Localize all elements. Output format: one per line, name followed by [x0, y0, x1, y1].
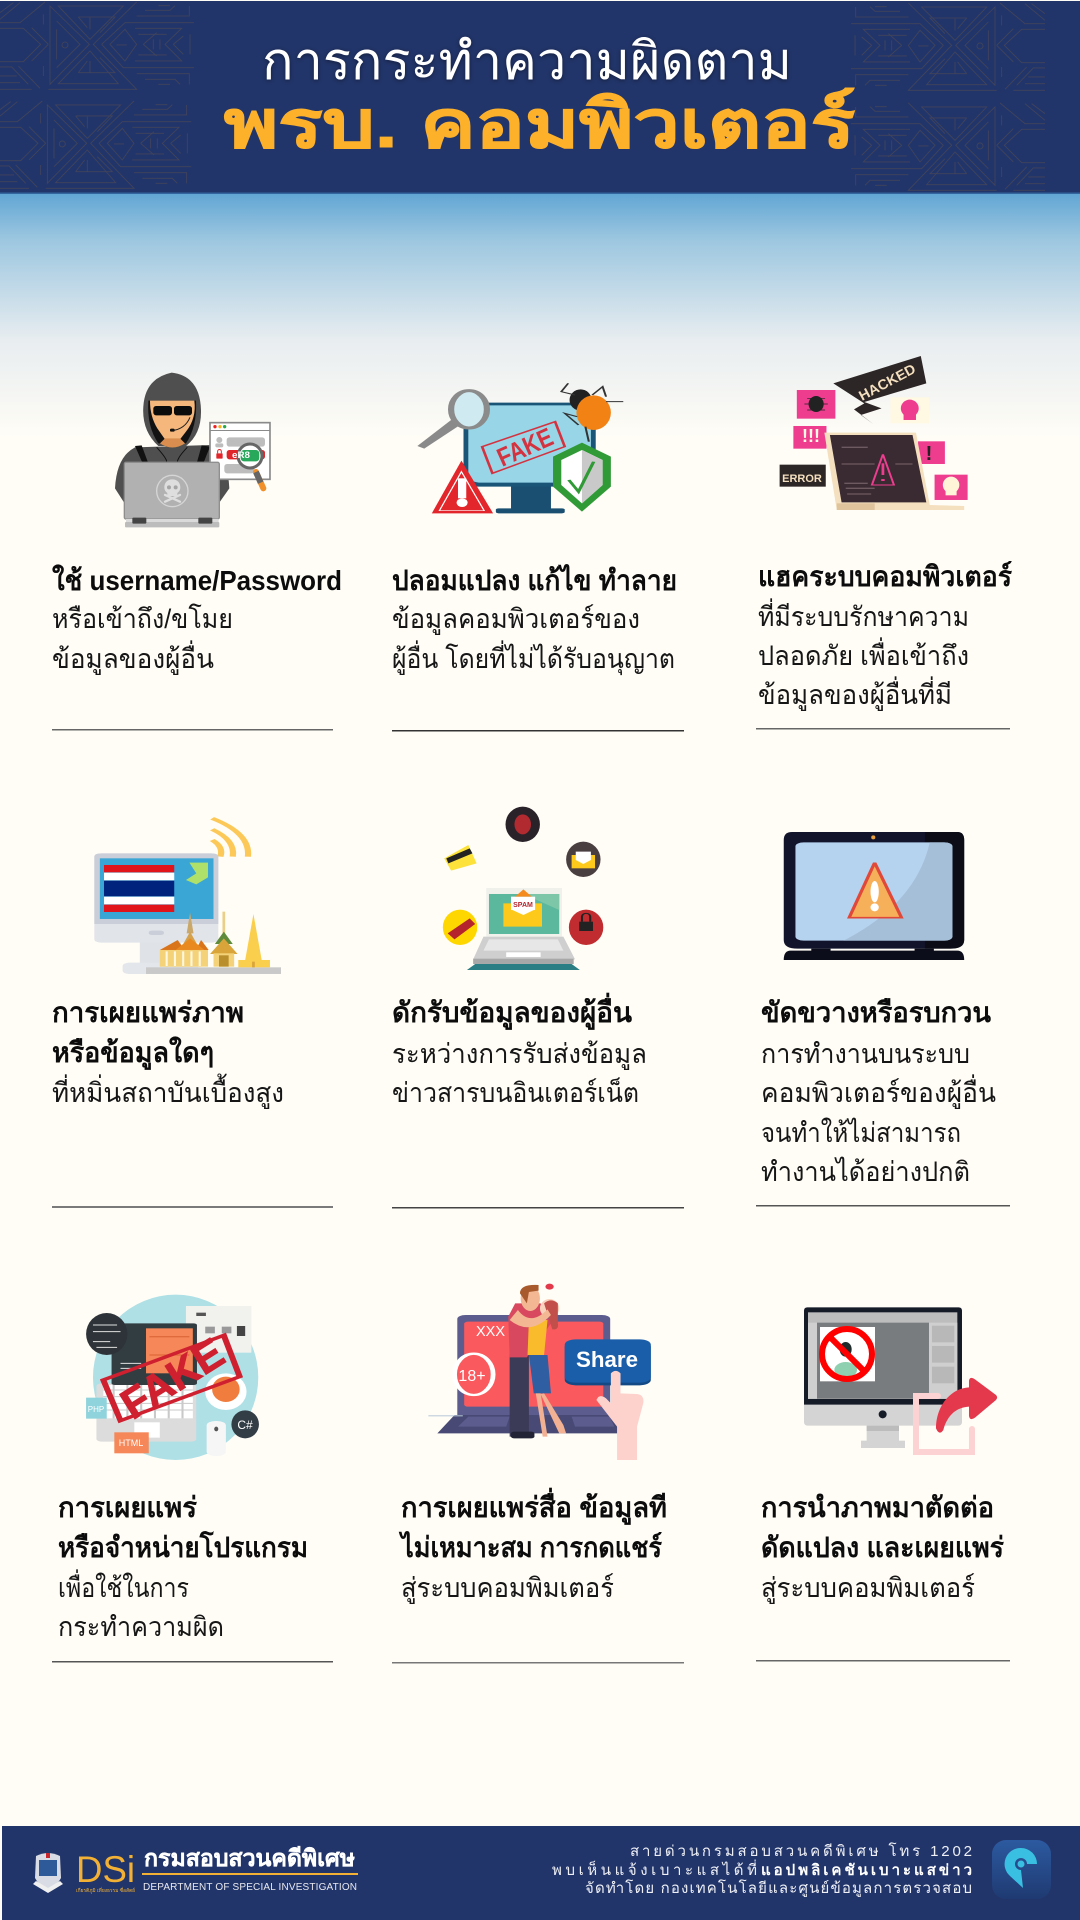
text: item 1 [52, 564, 342, 675]
contact text: พบเห็นแจ้งเบาะแสได้ที่ [552, 1859, 757, 1879]
text: item 2 [392, 564, 677, 676]
header pattern: left [0, 2, 194, 188]
text: item 2: ปลอมแปลง แก้ไข ทำลาย [392, 564, 677, 596]
text: item 4: ที่หมิ่นสถาบันเบื้องสูง [52, 1073, 284, 1109]
text: item 8: ไม่เหมาะสม การกดแชร์ [398, 1531, 662, 1563]
icon: fake monitor with spider and shield: FAKE [492, 422, 558, 472]
icon: hacked laptop and warnings: ! [926, 443, 932, 465]
text: item 7: กระทำความผิด [58, 1612, 224, 1642]
text: item 7: เพื่อใช้ในการ [58, 1569, 189, 1603]
title line 1: การกระทำความผิดตาม [262, 33, 792, 91]
text: item 4: การเผยแพร่ภาพ [52, 997, 244, 1028]
logo: tagline: เกียรติภูมิ เที่ยงธรรม ซื่อสัตย์ [76, 1887, 135, 1894]
text: item 5 [392, 992, 647, 1108]
department name Thai: กรมสอบสวนคดีพิเศษ [144, 1845, 355, 1871]
sky gradient band [0, 194, 1080, 438]
contact text: สายด่วนกรมสอบสวนคดีพิเศษ โทร 1202 [630, 1842, 972, 1860]
contact text: จัดทำโดย กองเทคโนโลยีและศูนย์ข้อมูลการตรวจสอบ [585, 1879, 972, 1897]
text: item 9 [761, 1492, 1004, 1604]
text: item 3: ข้อมูลของผู้อื่นที่มี [758, 676, 952, 711]
text: item 7: การเผยแพร่ [58, 1492, 197, 1523]
icon: hacker at laptop [115, 373, 270, 527]
text: item 5: ระหว่างการรับส่งข้อมูล [392, 1039, 647, 1070]
department name English: DEPARTMENT OF SPECIAL INVESTIGATION [143, 1882, 357, 1893]
logo: DSi wordmark: DSi [76, 1849, 135, 1890]
text: item 8: สู่ระบบคอมพิมเตอร์ [401, 1572, 614, 1604]
text: item 6: คอมพิวเตอร์ของผู้อื่น [761, 1074, 996, 1109]
text: item 8 [398, 1487, 667, 1604]
contact text: แอปพลิเคชันเบาะแสข่าว [761, 1861, 972, 1879]
icon: fake monitor with spider and shield [417, 383, 623, 513]
icon: iMac with prohibited image and share arrow [804, 1307, 997, 1452]
icon: spam mail laptop and threat circles [443, 807, 603, 970]
text: item 2: ผู้อื่น โดยที่ไม่ได้รับอนุญาต [392, 640, 675, 676]
icon: couple with share button: 18+ [458, 1368, 486, 1385]
text: item 4 [52, 997, 284, 1109]
text: item 7: หรือจำหน่ายโปรแกรม [58, 1530, 308, 1563]
text: item 3: ปลอดภัย เพื่อเข้าถึง [758, 637, 969, 671]
icon: fake software stamp [86, 1295, 259, 1460]
icon: report app [992, 1840, 1051, 1899]
icon: hacked laptop and warnings: HACKED [856, 360, 918, 404]
header pattern: right [851, 3, 1045, 190]
text: item 4: หรือข้อมูลใดๆ [52, 1036, 214, 1070]
icon: fake software stamp: FAKE [112, 1329, 232, 1428]
icon: hacked laptop and warnings: ERROR [782, 473, 822, 485]
contact text [552, 1842, 972, 1897]
text: item 3: แฮคระบบคอมพิวเตอร์ [758, 561, 1012, 592]
text: item 9: ดัดแปลง และเผยแพร่ [761, 1532, 1004, 1563]
icon: couple with share button [428, 1284, 651, 1460]
icon: hacker at laptop: eR8 [232, 450, 250, 460]
text: item 7 [58, 1492, 308, 1642]
icon: hacked laptop and warnings: !!! [802, 426, 820, 446]
icon: fake software stamp: C# [237, 1418, 253, 1432]
header banner [0, 1, 1080, 194]
text: item 1: ใช้ username/Password [52, 564, 342, 596]
icon: hacked laptop and warnings [780, 356, 968, 510]
text: item 3 [758, 561, 1012, 711]
text: item 6 [761, 997, 996, 1187]
text: item 9: การนำภาพมาตัดต่อ [761, 1492, 994, 1523]
text: item 1: ข้อมูลของผู้อื่น [52, 640, 214, 675]
text: item 6: จนทำให้ไม่สามารถ [761, 1117, 961, 1148]
text: item 5: ข่าวสารบนอินเตอร์เน็ต [392, 1075, 639, 1108]
text: item 1: หรือเข้าถึง/ขโมย [52, 604, 233, 634]
icon: couple with share button: Share [576, 1347, 638, 1372]
text: item 6: การทำงานบนระบบ [761, 1039, 970, 1069]
text: item 5: ดักรับข้อมูลของผู้อื่น [392, 992, 632, 1030]
text: item 9: สู่ระบบคอมพิมเตอร์ [761, 1572, 975, 1604]
footer bar [2, 1826, 1080, 1920]
text: item 2: ข้อมูลคอมพิวเตอร์ของ [392, 603, 640, 635]
icon: monitor with Thai flag and temple [94, 818, 281, 974]
icon: couple with share button: XXX [476, 1323, 505, 1340]
icon: fake software stamp: PHP [88, 1405, 104, 1414]
icon: fake software stamp: HTML [119, 1438, 143, 1448]
text: item 3: ที่มีระบบรักษาความ [758, 598, 969, 632]
text: item 8: การเผยแพร่สื่อ ข้อมูลที [401, 1487, 667, 1525]
text: item 6: ทำงานได้อย่างปกติ [761, 1157, 970, 1187]
icon: spam mail laptop and threat circles: SPAM [513, 902, 533, 909]
logo: DSI shield [33, 1853, 63, 1893]
text: item 6: ขัดขวางหรือรบกวน [761, 997, 991, 1028]
icon: tablet with warning sign [784, 832, 964, 960]
title line 2: พรบ. คอมพิวเตอร์ [224, 87, 855, 161]
